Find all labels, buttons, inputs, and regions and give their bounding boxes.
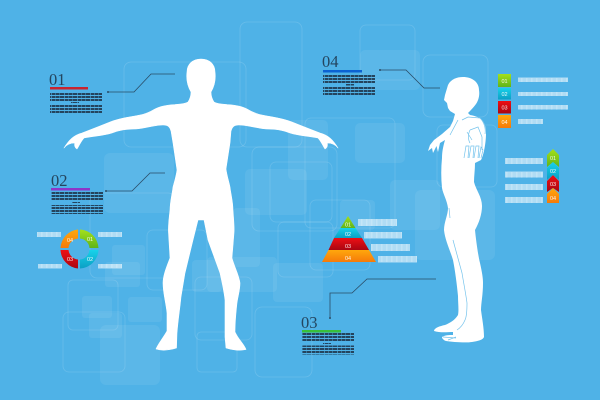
segment 01: 01 [87, 237, 93, 243]
heading 03: 03 [301, 313, 318, 332]
segment 03: 03 [67, 257, 73, 263]
leader line 01 [107, 74, 175, 93]
arrow 03: 03 [550, 182, 556, 188]
arrow 01: 01 [550, 156, 556, 162]
accent bar 01 [50, 87, 88, 90]
heading 02: 02 [51, 171, 68, 190]
leader line 04 [379, 69, 440, 88]
side-view human figure [428, 77, 486, 342]
pyramid layer 04: 04 [345, 256, 351, 262]
pyramid labels [358, 219, 417, 262]
arrow stack [547, 149, 559, 203]
accent bar 02 [51, 188, 90, 190]
list item 03: 03 [501, 106, 508, 112]
text block 03 [302, 333, 354, 354]
list item 01: 01 [501, 79, 508, 85]
heading 04: 04 [322, 52, 338, 71]
square list labels [518, 78, 568, 124]
side figure contour lines [443, 117, 485, 340]
accent bar 04 [323, 70, 362, 72]
list item 04: 04 [501, 120, 508, 126]
pyramid layer 03: 03 [345, 244, 351, 250]
leader line 02 [105, 173, 165, 192]
donut chart [60, 230, 98, 268]
arrow 04: 04 [550, 196, 556, 202]
segment 04: 04 [67, 238, 73, 244]
arrow 02: 02 [550, 169, 556, 175]
square list [498, 74, 511, 128]
segment 02: 02 [87, 257, 93, 263]
pyramid layer 01: 01 [345, 222, 351, 228]
pyramid layer 02: 02 [345, 232, 351, 238]
list item 02: 02 [501, 92, 508, 98]
accent bar 03 [302, 330, 341, 332]
donut labels [37, 232, 122, 268]
text block 04 [323, 74, 375, 96]
text block 01 [50, 92, 102, 113]
front-view human silhouette [64, 59, 338, 350]
translucent background panels [63, 22, 497, 385]
pyramid chart [322, 216, 376, 262]
heading 01: 01 [49, 70, 66, 89]
arrow stack labels [505, 158, 543, 203]
leader line 03 [329, 279, 436, 319]
text block 02 [51, 192, 103, 214]
